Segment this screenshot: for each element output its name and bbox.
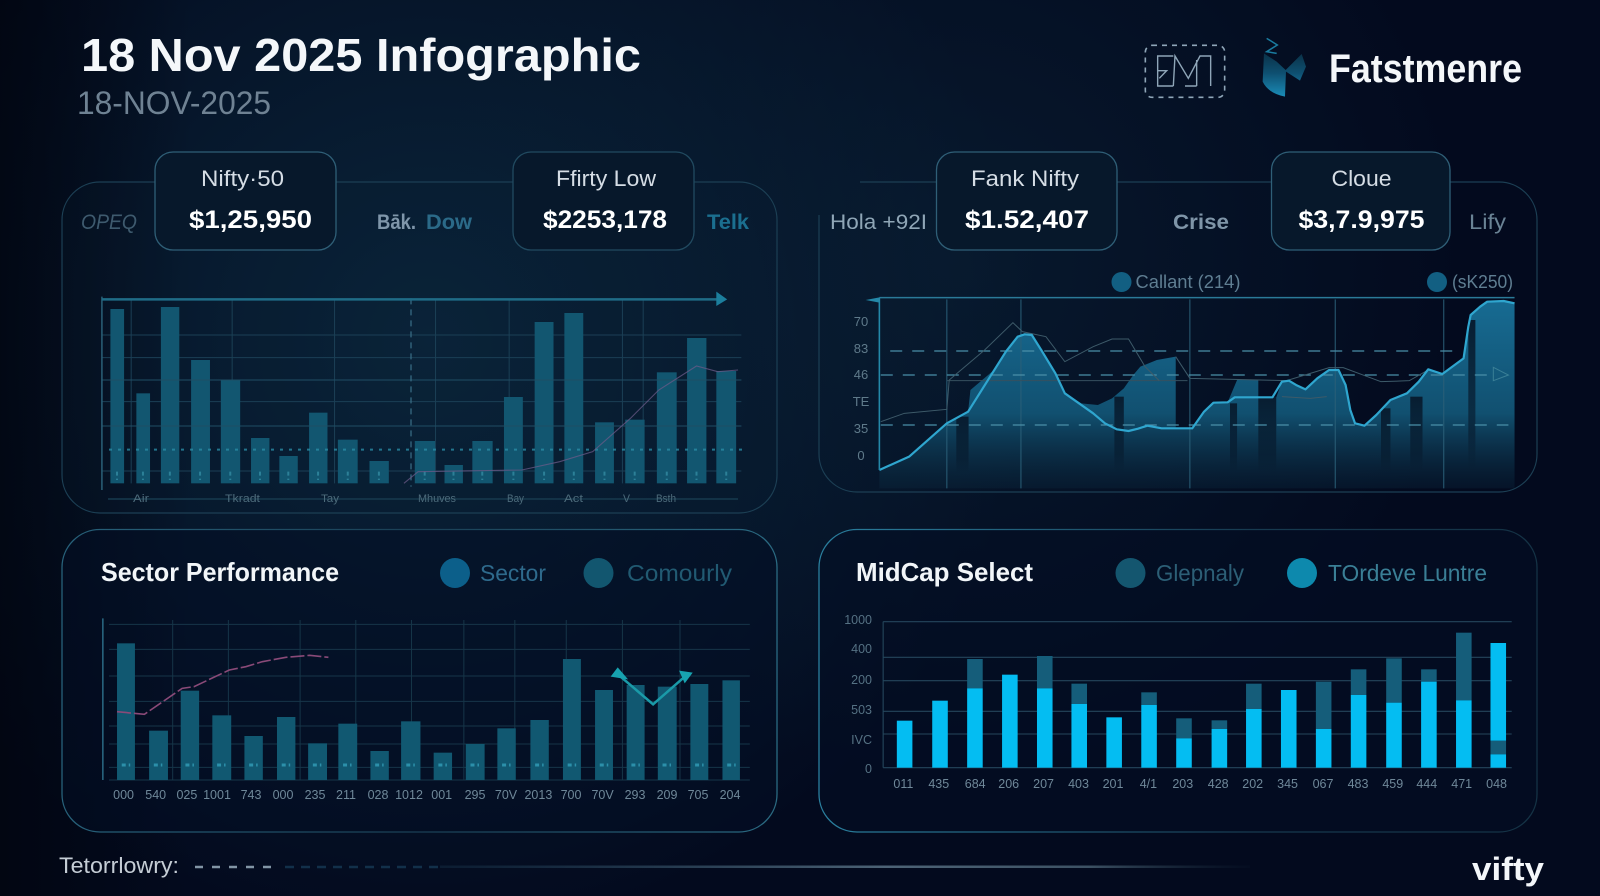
x axis labels: 209 bbox=[657, 788, 677, 802]
x axis labels: 540 bbox=[145, 788, 166, 802]
x axis labels: 684 bbox=[965, 777, 986, 791]
x axis labels: V bbox=[623, 493, 631, 505]
x axis labels: 700 bbox=[561, 788, 581, 802]
x axis labels: 403 bbox=[1068, 777, 1089, 791]
panel outline bbox=[62, 182, 777, 513]
side labels bbox=[830, 211, 1507, 234]
x axis labels: Bsth bbox=[656, 493, 676, 505]
side labels: Dow bbox=[426, 211, 473, 234]
footer dashed rule bbox=[195, 866, 1250, 868]
x axis labels: 000 bbox=[113, 788, 134, 802]
x axis labels: Mhuves bbox=[418, 493, 456, 505]
icon: dashed monogram bbox=[1145, 45, 1225, 97]
y axis labels: 400 bbox=[851, 642, 872, 656]
y axis labels: 503 bbox=[851, 703, 872, 717]
side labels: OPEQ bbox=[81, 211, 137, 234]
legend bbox=[1112, 272, 1513, 292]
y axis labels: 35 bbox=[854, 421, 868, 436]
side labels: Crise bbox=[1173, 211, 1229, 234]
x axis labels bbox=[108, 493, 738, 505]
x axis labels: 028 bbox=[368, 788, 388, 802]
x axis labels: 70V bbox=[591, 788, 614, 802]
panel: top-right area chart bbox=[819, 152, 1537, 492]
card: Close: Cloue bbox=[1332, 166, 1392, 191]
bar chart bbox=[102, 292, 746, 490]
x axis labels: 048 bbox=[1486, 777, 1507, 791]
card: Close bbox=[1272, 152, 1450, 250]
card: Nifty 50: Nifty·50 bbox=[201, 166, 284, 191]
legend: Callant (214) bbox=[1136, 272, 1240, 292]
x axis labels: 471 bbox=[1451, 777, 1472, 791]
card: Close: $3,7.9,975 bbox=[1298, 206, 1425, 234]
y axis labels: 70 bbox=[854, 314, 868, 329]
panel: MidCap Select bbox=[819, 530, 1537, 832]
footer label: Tetorrlowry: bbox=[59, 853, 179, 878]
y axis labels bbox=[844, 613, 872, 776]
y axis labels: TE bbox=[853, 394, 870, 409]
x axis labels: 235 bbox=[305, 788, 325, 802]
x axis labels: 211 bbox=[336, 788, 356, 802]
side labels: Hola +92I bbox=[830, 211, 927, 234]
x axis labels: 435 bbox=[928, 777, 949, 791]
card: Fifty Low: Ffirty Low bbox=[556, 166, 656, 191]
legend: Comourly bbox=[627, 560, 733, 586]
stacked bar chart bbox=[883, 622, 1512, 768]
x axis labels: 459 bbox=[1382, 777, 1403, 791]
y axis labels: IVC bbox=[851, 733, 872, 747]
heading: MidCap Select bbox=[856, 557, 1033, 587]
panel outline bbox=[62, 530, 777, 832]
subtitle date: 18-NOV-2025 bbox=[77, 85, 271, 121]
x axis labels bbox=[113, 788, 740, 802]
footer brand: vifty bbox=[1472, 851, 1544, 887]
y axis labels: 1000 bbox=[844, 613, 872, 627]
x axis labels: 345 bbox=[1277, 777, 1298, 791]
card: Nifty 50 bbox=[155, 152, 336, 250]
panel: top-left bar chart bbox=[62, 152, 777, 513]
x axis labels: 207 bbox=[1033, 777, 1054, 791]
legend bbox=[440, 558, 733, 588]
x axis labels: 2013 bbox=[524, 788, 552, 802]
x axis labels: Bay bbox=[507, 493, 524, 505]
card: Nifty 50: $1,25,950 bbox=[189, 206, 312, 234]
x axis labels: 067 bbox=[1313, 777, 1333, 791]
legend: Glepnaly bbox=[1156, 560, 1244, 586]
y axis labels: 0 bbox=[865, 762, 872, 776]
x axis labels: 70V bbox=[495, 788, 518, 802]
card: Bank Nifty bbox=[936, 152, 1117, 250]
legend: TOrdeve Luntre bbox=[1328, 560, 1487, 586]
x axis labels: 203 bbox=[1172, 777, 1193, 791]
x axis labels: 1012 bbox=[395, 788, 423, 802]
x axis labels: 1001 bbox=[203, 788, 231, 802]
side labels: Telk bbox=[707, 211, 749, 234]
x axis labels: 483 bbox=[1348, 777, 1368, 791]
x axis labels: 202 bbox=[1242, 777, 1263, 791]
x axis labels: 206 bbox=[998, 777, 1019, 791]
y axis labels: 46 bbox=[854, 367, 868, 382]
card: Bank Nifty: Fank Nifty bbox=[971, 166, 1079, 191]
area chart bbox=[866, 297, 1515, 488]
brand name: Fatstmenre bbox=[1329, 47, 1522, 91]
x axis labels: Tay bbox=[321, 493, 340, 505]
heading: Sector Performance bbox=[101, 557, 339, 587]
x axis labels bbox=[893, 777, 1507, 791]
x axis labels: 295 bbox=[465, 788, 485, 802]
x axis labels: 705 bbox=[688, 788, 708, 802]
x axis labels: 000 bbox=[273, 788, 293, 802]
x axis labels: Tkradt bbox=[225, 493, 260, 505]
y axis labels: 83 bbox=[854, 341, 868, 356]
x axis labels: 201 bbox=[1103, 777, 1123, 791]
panel: Sector Performance bbox=[62, 530, 777, 832]
y axis labels bbox=[853, 314, 870, 463]
x axis labels: 743 bbox=[241, 788, 261, 802]
x axis labels: 001 bbox=[431, 788, 452, 802]
x axis labels: 444 bbox=[1416, 777, 1437, 791]
x axis labels: 204 bbox=[720, 788, 740, 802]
card: Bank Nifty: $1.52,407 bbox=[965, 206, 1089, 234]
legend: (sK250) bbox=[1452, 272, 1513, 292]
icon: brand logo bbox=[1263, 38, 1306, 97]
x axis labels: 025 bbox=[176, 788, 197, 802]
card: Fifty Low: $2253,178 bbox=[543, 206, 667, 234]
title: 18 Nov 2025 Infographic bbox=[81, 29, 641, 81]
side labels bbox=[81, 211, 749, 234]
bar chart bbox=[103, 618, 750, 780]
legend bbox=[1116, 558, 1487, 588]
x axis labels: 428 bbox=[1208, 777, 1229, 791]
legend: Sector bbox=[480, 560, 546, 586]
y axis labels: 200 bbox=[851, 673, 872, 687]
y axis labels: 0 bbox=[857, 448, 865, 463]
side labels: Lify bbox=[1469, 211, 1507, 234]
x axis labels: 293 bbox=[625, 788, 645, 802]
panel outline bbox=[819, 530, 1537, 832]
x axis labels: 011 bbox=[893, 777, 913, 791]
x axis labels: Act bbox=[564, 493, 583, 505]
side labels: Bāk. bbox=[377, 211, 416, 234]
panel outline bbox=[819, 182, 1537, 492]
x axis labels: 4/1 bbox=[1140, 777, 1157, 791]
x axis labels: Air bbox=[133, 493, 149, 505]
card: Fifty Low bbox=[513, 152, 694, 250]
